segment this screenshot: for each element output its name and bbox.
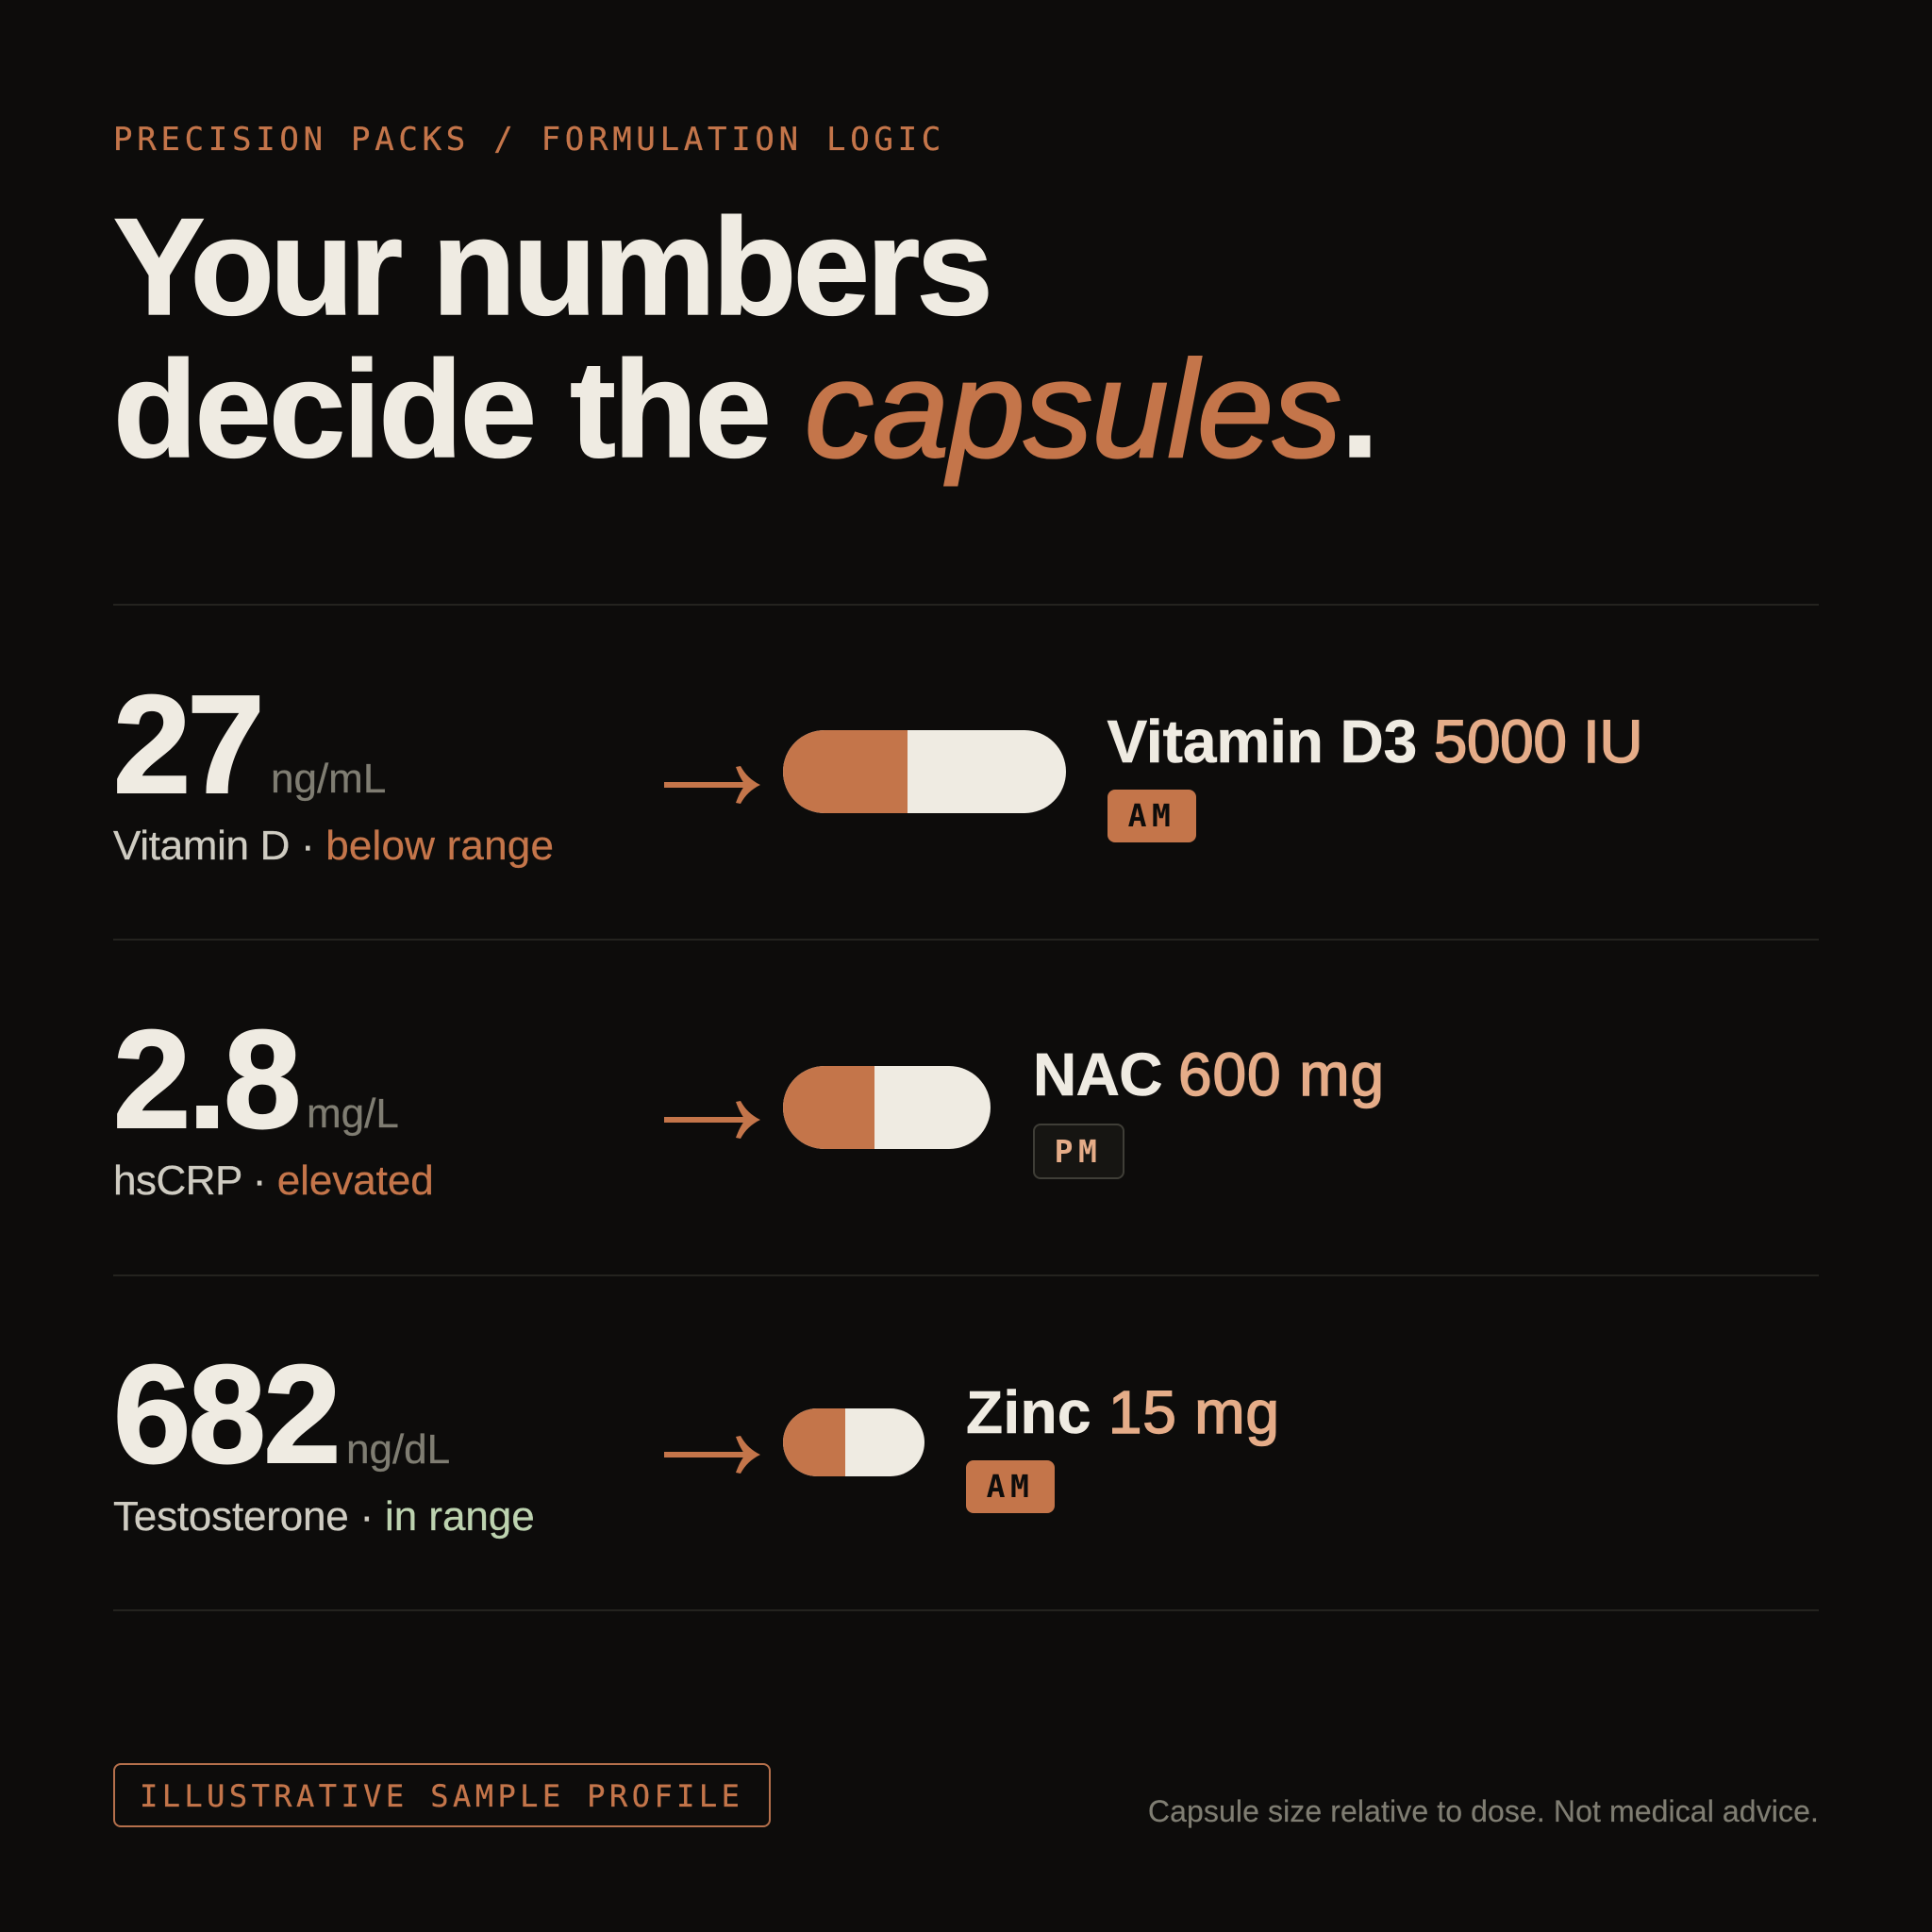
title: Your numbers [113, 190, 990, 343]
supplement name and dose: Vitamin D3 5000 IU [1108, 708, 1642, 775]
badge: PM: PM [1055, 1133, 1102, 1170]
biomarker label: Testosterone · in range [113, 1493, 535, 1540]
badge: AM: AM [987, 1468, 1034, 1505]
badge: AM [1108, 790, 1196, 842]
arrow [664, 766, 760, 804]
title: decide the capsules. [113, 332, 1376, 486]
biomarker label: hsCRP · elevated [113, 1158, 434, 1204]
capsule: 15 mg [783, 1408, 924, 1476]
badge: AM: AM [1128, 797, 1175, 834]
title [113, 190, 1376, 487]
badge: PM [1033, 1124, 1124, 1179]
value: 682: 682 [113, 1337, 339, 1492]
supplement name and dose: NAC 600 mg [1033, 1041, 1385, 1108]
value: 27: 27 [113, 667, 261, 823]
arrow [664, 1101, 760, 1139]
unit: ng/mL: ng/mL [271, 756, 386, 802]
supplement name and dose: Zinc 15 mg [966, 1378, 1280, 1446]
row: testosterone [113, 1337, 1280, 1540]
value: 2.8: 2.8 [113, 1002, 298, 1158]
capsule: 600 mg [783, 1066, 991, 1149]
sample profile tag [113, 1763, 771, 1827]
biomarker label: Vitamin D · below range [113, 823, 554, 869]
footnote: Capsule size relative to dose. Not medical advice. [1148, 1794, 1819, 1828]
capsule: 5000 IU [783, 730, 1066, 813]
row: vitamin D [113, 667, 1642, 869]
unit: mg/L: mg/L [307, 1091, 399, 1137]
sample profile tag: ILLUSTRATIVE SAMPLE PROFILE [140, 1778, 743, 1814]
eyebrow label: PRECISION PACKS / FORMULATION LOGIC [113, 121, 945, 158]
unit: ng/dL: ng/dL [346, 1426, 450, 1472]
row: hsCRP [113, 1002, 1385, 1204]
badge: AM [966, 1460, 1055, 1513]
arrow [664, 1436, 760, 1474]
